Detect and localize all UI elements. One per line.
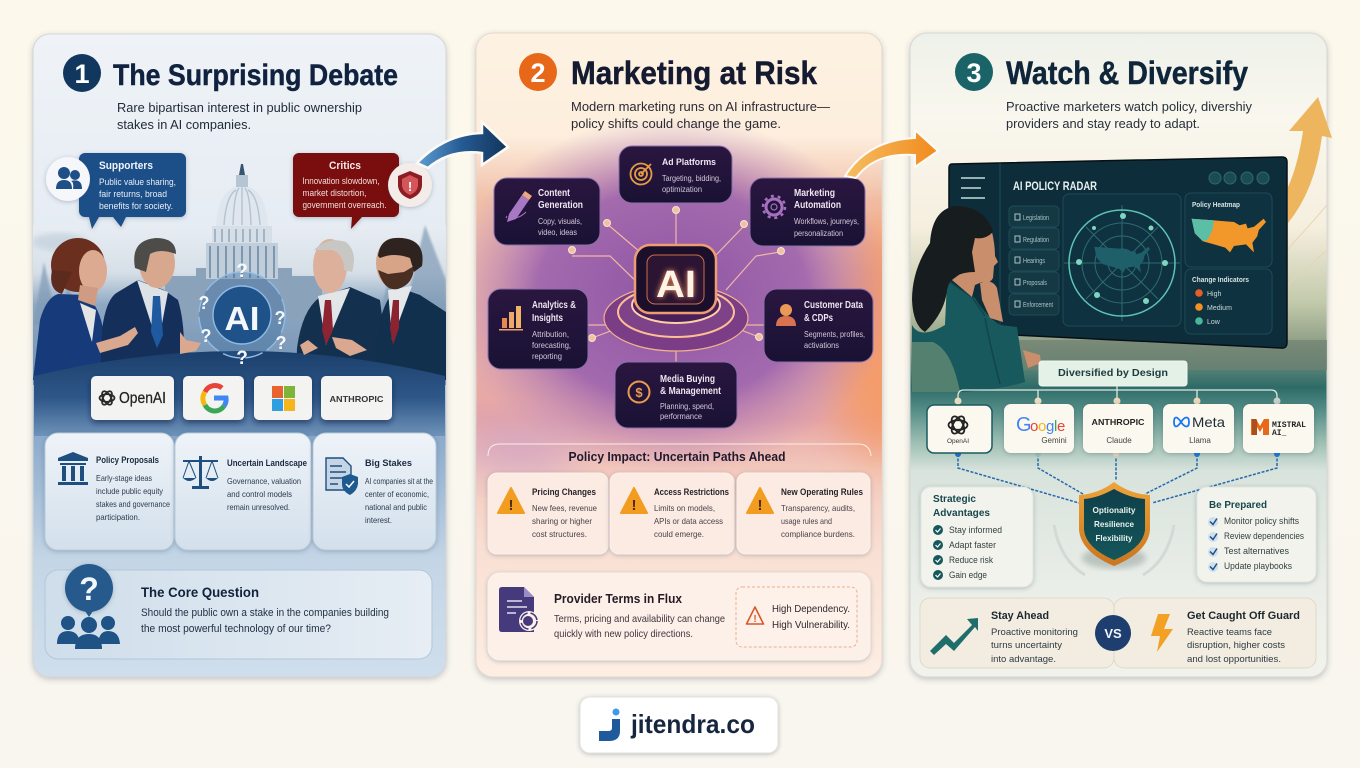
connector: dashed links to shield — [958, 454, 1277, 503]
card: get caught off guard — [1114, 598, 1316, 668]
number badge 2 — [519, 53, 557, 91]
logo card: Anthropic: ANTHROPIC — [330, 394, 384, 404]
logo card: Google — [183, 376, 244, 420]
callout: high dependency: ! — [753, 614, 757, 625]
provider card: Google Gemini: G — [1016, 414, 1032, 436]
subtitle 1: stakes in AI companies. — [117, 117, 251, 132]
provider card: Mistral AI: AI_ — [1272, 429, 1287, 438]
AI emblem with question marks — [198, 261, 286, 369]
connector lines — [572, 211, 780, 362]
card: big stakes: Big Stakes — [365, 458, 412, 468]
node: analytics and insights: Analytics & — [532, 300, 576, 311]
label: diversified by design: Diversified by Design — [1058, 367, 1168, 379]
panel 2: Marketing at Risk — [472, 31, 886, 683]
icon: scales — [183, 456, 218, 489]
provider card: Anthropic Claude — [1083, 404, 1153, 453]
card: be prepared: Update playbooks — [1224, 561, 1292, 571]
shield: optionality resilience flexibility: Resilience — [1094, 519, 1134, 529]
icon: critics shield — [388, 163, 432, 207]
card: strategic advantages: Reduce risk — [949, 555, 993, 565]
provider card: Anthropic Claude: Claude — [1106, 436, 1132, 445]
sidebar menu — [961, 177, 1059, 315]
sidebar menu: Regulation — [1023, 237, 1049, 244]
card: pricing changes: New fees, revenue — [532, 503, 597, 513]
provider card: Google Gemini: e — [1057, 418, 1065, 435]
node: media buying: & Management — [660, 386, 722, 397]
shield: optionality resilience flexibility: Optionality — [1092, 505, 1136, 515]
card: stay ahead — [920, 598, 1114, 668]
person hands — [96, 327, 367, 356]
heading 1: The Surprising Debate — [113, 59, 398, 92]
node: customer data: activations — [804, 341, 839, 350]
check icons — [933, 525, 943, 580]
card: strategic advantages: Gain edge — [949, 570, 987, 580]
callout: high dependency: High Vulnerability. — [772, 619, 850, 631]
provider card: OpenAI: OpenAI — [947, 438, 969, 445]
number badge 2: 2 — [530, 58, 546, 88]
scene backdrop — [32, 225, 446, 385]
icon: warning triangle: ! — [508, 497, 514, 514]
change indicators legend — [1185, 269, 1272, 334]
panel 1: The Surprising Debate — [32, 34, 446, 677]
callout: critics: market distortion, — [302, 188, 366, 198]
arrow: growth arrow — [1288, 97, 1332, 223]
node: marketing automation: Automation — [794, 200, 841, 211]
card: core question — [45, 564, 432, 659]
subtitle 3: providers and stay ready to adapt. — [1006, 116, 1200, 131]
card: policy proposals: Policy Proposals — [96, 455, 159, 465]
card: access restrictions: Access Restrictions — [654, 487, 729, 497]
card: access restrictions: could emerge. — [654, 529, 704, 539]
panel 3: Watch and Diversify — [910, 33, 1332, 677]
provider card: Anthropic Claude: ANTHROPIC — [1092, 417, 1144, 427]
node: analytics and insights: Attribution, — [532, 330, 569, 339]
card: policy proposals: include public equity — [96, 486, 164, 496]
heading 2: Marketing at Risk — [571, 55, 817, 91]
callout: supporters: Public value sharing, — [99, 177, 176, 187]
sidebar menu: Legislation — [1023, 215, 1049, 222]
subtitle 1 — [117, 100, 362, 132]
sidebar menu: Hearings — [1023, 258, 1045, 265]
card: big stakes: interest. — [365, 515, 392, 525]
node: ad platforms — [619, 146, 732, 203]
card: pricing changes: sharing or higher — [532, 516, 592, 526]
icon: government building — [58, 452, 88, 485]
provider card: Meta Llama: Meta — [1192, 414, 1225, 430]
card: provider terms in flux: Provider Terms in Flux — [554, 591, 683, 606]
logo card: OpenAI: OpenAI — [119, 390, 166, 407]
card: uncertain landscape — [175, 433, 311, 550]
card: be prepared: Be Prepared — [1209, 500, 1267, 511]
card: new operating rules: compliance burdens. — [781, 529, 855, 539]
node: marketing automation: Marketing — [794, 188, 835, 199]
subtitle 2: policy shifts could change the game. — [571, 116, 781, 131]
toolbar dots — [1209, 172, 1269, 184]
callout: high dependency — [736, 587, 857, 647]
node: marketing automation — [750, 178, 865, 246]
node: analytics and insights: Insights — [532, 313, 563, 324]
icon: document with refresh — [499, 587, 539, 632]
person: analyst watching monitor — [912, 206, 1041, 392]
AI emblem with question marks: ? — [200, 326, 212, 346]
logo: jitendra.co: jitendra.co — [630, 709, 755, 739]
card: big stakes: AI companies sit at the — [365, 476, 433, 486]
provider card: Google Gemini: l — [1054, 418, 1057, 435]
label: diversified by design — [1039, 361, 1187, 386]
AI emblem with question marks: ? — [198, 293, 210, 313]
number badge 1 — [63, 54, 101, 92]
card: be prepared: Test alternatives — [1224, 546, 1289, 556]
card: access restrictions: Limits on models, — [654, 503, 715, 513]
icon: rising arrow — [930, 618, 978, 655]
logo card: Microsoft — [254, 376, 312, 420]
radar chart — [1063, 194, 1181, 326]
arrow: panel 1 to panel 2 — [417, 122, 508, 168]
card: pricing changes — [488, 473, 608, 554]
card: get caught off guard: Reactive teams face — [1187, 627, 1272, 638]
node: customer data: Customer Data — [804, 300, 863, 311]
sidebar menu: Proposals — [1023, 280, 1047, 287]
person: man supporter — [100, 238, 190, 380]
card: be prepared: Monitor policy shifts — [1224, 516, 1299, 526]
node: content generation — [494, 178, 600, 245]
AI emblem with question marks: ? — [274, 308, 286, 328]
provider card: Google Gemini — [1004, 404, 1074, 453]
node: ad platforms: Targeting, bidding, — [662, 174, 721, 183]
callout: high dependency: High Dependency. — [772, 603, 850, 615]
node: customer data — [764, 289, 873, 362]
card: policy proposals: participation. — [96, 512, 140, 522]
heading 3: Watch & Diversify — [1006, 55, 1248, 91]
callout: critics: government overreach. — [302, 200, 386, 210]
AI core chip: AI — [656, 264, 696, 306]
purple glow background — [476, 123, 882, 482]
node: content generation: Copy, visuals, — [538, 217, 582, 226]
callout: supporters: benefits for society. — [99, 201, 173, 211]
card: core question: the most powerful technology of our time? — [141, 623, 331, 635]
badge: VS — [1095, 615, 1131, 651]
card: uncertain landscape: Governance, valuation — [227, 476, 301, 486]
card: access restrictions — [610, 473, 734, 554]
AI emblem with question marks: ? — [236, 261, 248, 282]
heatmap panel: Policy Heatmap — [1192, 200, 1240, 209]
card: uncertain landscape: remain unresolved. — [227, 502, 290, 512]
callout: supporters — [79, 153, 186, 229]
change indicators legend: Change Indicators — [1192, 275, 1249, 284]
shield: optionality resilience flexibility — [1054, 482, 1174, 575]
person: man critic bearded — [374, 238, 446, 380]
connector nodes — [568, 206, 784, 342]
heatmap panel — [1185, 193, 1272, 267]
card: uncertain landscape: Uncertain Landscape — [227, 458, 307, 468]
person: man critic grey hair — [296, 239, 385, 380]
card: strategic advantages — [921, 487, 1033, 587]
icon: target — [630, 164, 652, 184]
AI emblem with question marks: ? — [276, 333, 286, 353]
card: provider terms in flux — [488, 573, 870, 660]
card: policy proposals — [45, 433, 174, 550]
icon: warning triangle: ! — [758, 497, 762, 514]
card: big stakes: national and public — [365, 502, 428, 512]
card: core question: Should the public own a stake in the companies building — [141, 607, 389, 619]
arrow: panel 2 to panel 3 — [845, 130, 938, 178]
node: analytics and insights: reporting — [532, 352, 562, 361]
node: media buying: performance — [660, 412, 703, 421]
icon: person — [776, 304, 796, 326]
callout: supporters: Supporters — [99, 160, 153, 172]
card: big stakes — [313, 433, 436, 550]
card: pricing changes: Pricing Changes — [532, 487, 596, 497]
card: get caught off guard: and lost opportunities. — [1187, 654, 1281, 665]
AI core chip: AI — [656, 264, 696, 306]
table — [34, 351, 445, 436]
card: provider terms in flux: quickly with new policy directions. — [554, 628, 693, 640]
connector: top tree — [958, 386, 1277, 401]
card: stay ahead: turns uncertainty — [991, 640, 1062, 651]
subtitle 2: Modern marketing runs on AI infrastructure— — [571, 99, 830, 114]
sidebar menu: Enforcement — [1023, 302, 1053, 309]
card: get caught off guard: Get Caught Off Guard — [1187, 610, 1300, 622]
icon: pencil — [506, 191, 532, 222]
icon: bar chart — [499, 306, 523, 330]
icon: critics shield: ! — [408, 179, 412, 194]
provider card: Google Gemini: g — [1046, 418, 1054, 435]
subtitle 3 — [1006, 99, 1252, 131]
node: analytics and insights: forecasting, — [532, 341, 571, 350]
card: be prepared — [1197, 487, 1316, 582]
section: policy impact: Policy Impact: Uncertain Paths Ahead — [568, 450, 786, 464]
person: woman supporter — [33, 238, 110, 380]
icon: dollar coin: $ — [635, 385, 643, 400]
subtitle 3: Proactive marketers watch policy, divershiy — [1006, 99, 1252, 114]
card: strategic advantages: Adapt faster — [949, 540, 996, 550]
badge: VS: VS — [1104, 626, 1122, 641]
card: new operating rules: Transparency, audits, — [781, 503, 855, 513]
card: policy proposals: stakes and governance — [96, 499, 170, 509]
card: get caught off guard: disruption, higher costs — [1187, 640, 1285, 651]
shield: optionality resilience flexibility: Flexibility — [1096, 533, 1133, 543]
card: strategic advantages: Stay informed — [949, 525, 1002, 535]
icon: supporters people — [46, 157, 90, 201]
AI emblem with question marks: ? — [236, 348, 248, 369]
provider card: Meta Llama — [1163, 404, 1234, 453]
dashboard title: AI POLICY RADAR — [1013, 181, 1098, 193]
provider card: Google Gemini: o — [1038, 418, 1046, 435]
card: stay ahead: into advantage. — [991, 654, 1056, 665]
node: media buying: Planning, spend, — [660, 402, 714, 411]
node: media buying: Media Buying — [660, 374, 715, 385]
logo card: OpenAI — [91, 376, 174, 420]
card: pricing changes: cost structures. — [532, 529, 587, 539]
icon: gear — [763, 196, 785, 218]
check icons — [1208, 517, 1218, 572]
subtitle 2 — [571, 99, 830, 131]
callout: critics — [293, 153, 399, 229]
node: ad platforms: optimization — [662, 185, 702, 194]
card: be prepared: Review dependencies — [1224, 531, 1304, 541]
node: media buying — [615, 362, 737, 428]
node: customer data: Segments, profiles, — [804, 330, 865, 339]
card: access restrictions: APIs or data access — [654, 516, 723, 526]
logo: jitendra.co — [580, 697, 778, 753]
number badge 3: 3 — [966, 58, 982, 88]
card: big stakes: center of economic, — [365, 489, 429, 499]
change indicators legend: Medium — [1207, 305, 1232, 312]
monitor: AI policy radar dashboard — [949, 157, 1287, 348]
background wood strip behind desk — [1010, 205, 1327, 370]
capitol building — [165, 164, 322, 320]
card: uncertain landscape: and control models — [227, 489, 292, 499]
change indicators legend: High — [1207, 291, 1222, 298]
callout: critics: Critics — [329, 160, 361, 172]
logo card: Anthropic — [321, 376, 392, 420]
node: marketing automation: Workflows, journeys, — [794, 217, 859, 226]
card: stay ahead: Proactive monitoring — [991, 627, 1078, 638]
section: policy impact — [488, 444, 871, 554]
change indicators legend: Low — [1207, 319, 1221, 326]
callout: critics: Innovation slowdown, — [302, 176, 380, 186]
card: policy proposals: Early-stage ideas — [96, 473, 152, 483]
node: content generation: Generation — [538, 200, 583, 211]
connector nodes — [954, 398, 1280, 457]
card: stay ahead: Stay Ahead — [991, 610, 1049, 622]
node: content generation: video, ideas — [538, 228, 577, 237]
icon: warning triangle: ! — [632, 497, 636, 514]
provider card: Mistral AI: MISTRAL — [1272, 421, 1306, 430]
node: customer data: & CDPs — [804, 313, 833, 324]
card: strategic advantages: Strategic — [933, 494, 976, 505]
node: marketing automation: personalization — [794, 229, 843, 238]
number badge 1: 1 — [74, 59, 90, 89]
node: content generation: Content — [538, 188, 571, 199]
subtitle 1: Rare bipartisan interest in public ownership — [117, 100, 362, 115]
card: new operating rules: usage rules and — [781, 516, 832, 526]
AI core chip — [604, 245, 748, 351]
icon: document with shield — [326, 458, 358, 495]
provider card: Meta Llama: Llama — [1189, 436, 1211, 445]
icon: question bubble with people: ? — [79, 571, 99, 607]
AI emblem with question marks: AI — [224, 300, 260, 337]
card: core question: The Core Question — [141, 584, 259, 600]
icon: lightning bolt — [1151, 614, 1173, 652]
icon: question bubble with people — [57, 564, 120, 649]
card: new operating rules — [737, 473, 870, 554]
provider card: Google Gemini: o — [1030, 418, 1038, 435]
provider card: OpenAI — [927, 405, 992, 453]
number badge 3 — [955, 53, 993, 91]
provider card: Mistral AI — [1243, 404, 1314, 453]
card: new operating rules: New Operating Rules — [781, 487, 863, 497]
card: strategic advantages: Advantages — [933, 508, 990, 519]
provider card: Google Gemini: Gemini — [1041, 436, 1067, 445]
card: provider terms in flux: Terms, pricing and availability can change — [554, 613, 725, 625]
node: analytics and insights — [488, 289, 588, 369]
node: ad platforms: Ad Platforms — [662, 157, 716, 168]
callout: supporters: fair returns, broad — [99, 189, 167, 199]
